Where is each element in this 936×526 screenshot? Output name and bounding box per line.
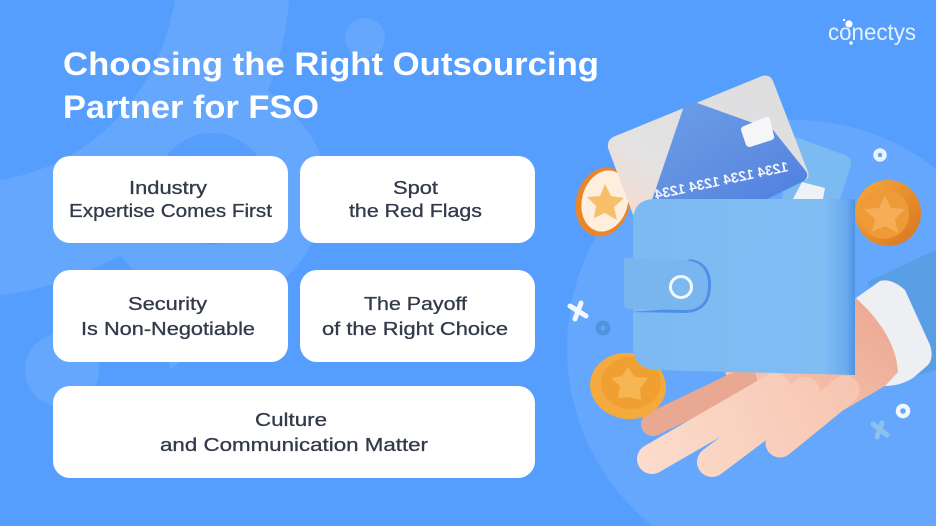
- card: payoff: The Payoff: [364, 293, 468, 314]
- finger: back, shaded: [653, 380, 745, 424]
- title: Choosing the Right Outsourcing: [63, 46, 599, 82]
- card: industry expertise: Expertise Comes First: [69, 200, 272, 221]
- card: red flags: the Red Flags: [349, 200, 482, 221]
- card: culture: and Communication Matter: [160, 434, 428, 455]
- credit card: blue glass: [652, 102, 807, 200]
- background shape: left swoosh: [0, 0, 325, 370]
- finger: middle: [712, 392, 805, 462]
- card: security: [53, 270, 288, 362]
- decorative ring: blue: [598, 323, 608, 333]
- hand palm: [725, 298, 900, 445]
- decorative ring: white lower: [898, 406, 908, 416]
- decorative ring: top right: [876, 150, 884, 160]
- decorative cross: white: [570, 303, 586, 319]
- background shape: left circle: [25, 333, 99, 407]
- background shape: small top circle: [345, 18, 385, 58]
- coin: bottom: [586, 348, 670, 424]
- logo: conectys: conectys: [828, 19, 916, 45]
- finger: ring: [780, 390, 845, 443]
- finger: index: [652, 388, 775, 459]
- background shape: large circle behind wallet: [567, 120, 936, 526]
- illustration: hand holding wallet: [568, 76, 936, 462]
- card: industry expertise: Industry: [129, 177, 208, 198]
- card: culture: [53, 386, 535, 478]
- card: red flags: Spot: [393, 177, 438, 198]
- credit card: grey: [608, 76, 808, 222]
- card: red flags: [300, 156, 535, 243]
- clasp button: [670, 276, 692, 298]
- shirt cuff: [856, 280, 932, 386]
- card: payoff: [300, 270, 535, 362]
- decorative cross: light blue: [873, 423, 887, 437]
- small chip behind wallet: [793, 182, 825, 199]
- wallet clasp: [624, 258, 708, 310]
- card: industry expertise: [53, 156, 288, 243]
- card: payoff: of the Right Choice: [322, 318, 508, 339]
- sleeve: [867, 250, 936, 376]
- coin: right: [855, 180, 921, 246]
- card chip: [741, 117, 774, 147]
- coin: left: [568, 161, 638, 243]
- credit card: back light blue: [780, 135, 851, 215]
- wallet clasp shadow: [630, 259, 711, 313]
- card: culture: Culture: [255, 409, 327, 430]
- card: security: Is Non-Negotiable: [81, 318, 255, 339]
- title: Partner for FSO: [63, 89, 319, 125]
- card number, mirrored: 1234 1234 1234 1234: [653, 158, 790, 202]
- wallet body: [633, 199, 855, 375]
- card: security: Security: [128, 293, 208, 314]
- title: [63, 46, 599, 125]
- background shape: dark disc: [156, 133, 268, 245]
